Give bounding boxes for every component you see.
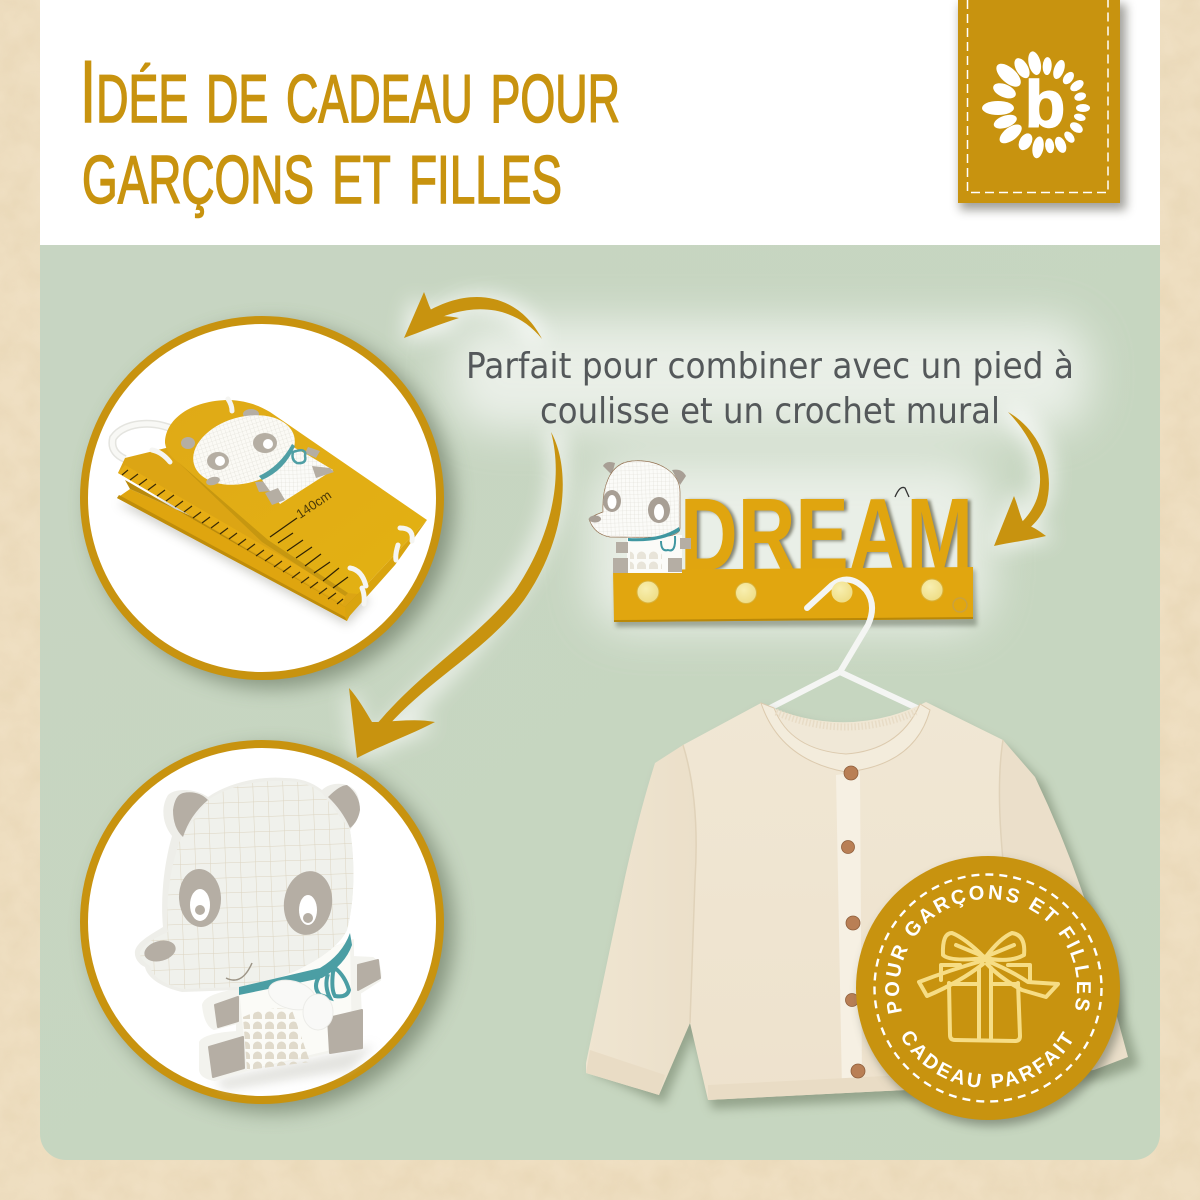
arrow: to DREAM rack (994, 412, 1049, 546)
logo tag with stitching (958, 0, 1126, 210)
panda ears (173, 785, 360, 837)
circle: folding height ruler (84, 320, 454, 688)
badge bottom text: CADEAU PARFAIT (902, 1031, 1072, 1088)
ruler label: 140cm (293, 487, 334, 521)
panda shadow (215, 1045, 375, 1090)
knob over hanger (832, 582, 852, 602)
arrow glows (352, 303, 1045, 750)
caption text: Parfait pour combiner avec un pied à (466, 346, 1074, 387)
arrow: to height ruler (404, 292, 542, 339)
panel: white header band (40, 0, 1160, 246)
small logo mark (953, 598, 967, 612)
hanger (770, 580, 917, 708)
rope ties (152, 399, 412, 604)
cardigan on hanger (586, 702, 1139, 1109)
panda limbs (209, 960, 380, 1077)
left sleeve (586, 745, 698, 1095)
placket (836, 772, 862, 1090)
top ruler board (165, 400, 427, 594)
icon: flower logo (982, 50, 1090, 159)
wooden buttons (842, 766, 865, 1078)
caption text: coulisse et un crochet mural (540, 391, 1000, 432)
panda head side (135, 778, 359, 992)
body (683, 702, 1010, 1100)
coat rack (589, 461, 977, 708)
title (80, 34, 620, 224)
wire loop (895, 487, 909, 497)
middle ruler board (118, 447, 358, 607)
middle board ticks (122, 470, 343, 604)
teal scarf (239, 933, 352, 998)
icon: gift box (919, 933, 1058, 1041)
title: garçons et filles (82, 115, 562, 224)
folded page edges (345, 520, 427, 620)
cardigan shadow (592, 709, 1139, 1109)
collar rib (761, 703, 930, 772)
caption text (466, 346, 1074, 432)
badge top text: POUR GARÇONS ET FILLES (885, 885, 1091, 1014)
panda eyes (178, 868, 336, 938)
mini panda (589, 461, 691, 573)
rope highlight (112, 424, 180, 459)
back collar rib (776, 712, 916, 727)
hems (586, 1050, 906, 1100)
panel: sage green background (40, 245, 1160, 1160)
white peg (265, 975, 333, 1030)
circle: panda wall hook closeup (84, 744, 454, 1112)
knobs (637, 579, 943, 604)
badge: cadeau parfait (854, 856, 1130, 1132)
ruler panda (181, 404, 334, 505)
rack base (613, 567, 973, 622)
ruler ticks (270, 518, 348, 588)
DREAM letters: DREAM (680, 477, 973, 592)
soft shadow under ruler (117, 500, 370, 625)
sleeve seams (683, 740, 1005, 1023)
arrow: to panda hook (349, 432, 563, 758)
panda body and limbs (200, 940, 380, 1080)
panda face grid (140, 781, 353, 989)
right sleeve (997, 740, 1128, 1080)
white glow behind central text and hook rack (450, 320, 1090, 630)
inner neck (772, 708, 918, 768)
panda nose and smile (142, 937, 252, 980)
rack shadow (615, 570, 977, 627)
bottom ruler board (117, 489, 362, 621)
icon: flower logo: b (1025, 67, 1065, 141)
belly pattern (243, 1009, 310, 1070)
title: Idée de cadeau pour (80, 34, 620, 143)
rope loop (112, 424, 180, 459)
